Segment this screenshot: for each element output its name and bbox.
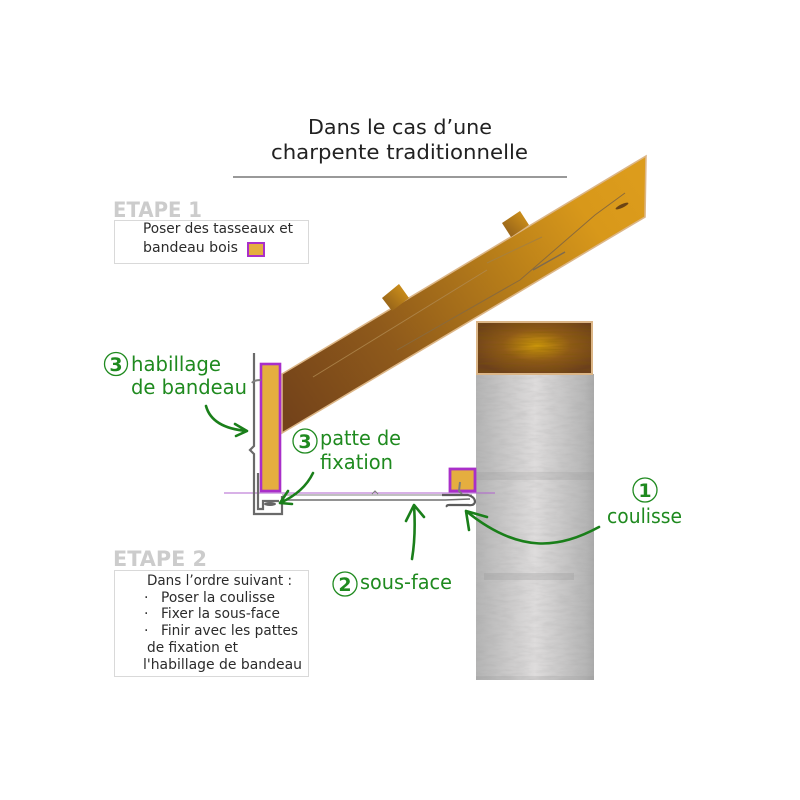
rafter beam [282,156,646,433]
step 2 box: Dans l’ordre suivant : [147,573,292,589]
step 2 box: · [144,590,148,606]
title [233,115,567,177]
label: patte de fixation: 3 [298,431,312,453]
arrow: patte de fixation [280,473,313,504]
label: sous-face [333,570,452,596]
step 1 box: Poser des tasseaux et [143,221,293,237]
step 2 box: Fixer la sous-face [161,606,280,622]
label: patte de fixation [293,426,401,474]
step 1 box [114,220,308,264]
wall column [476,374,594,680]
step 2 box: · [144,606,148,622]
wood end grain [477,322,592,374]
step 2 box: Poser la coulisse [161,590,275,606]
step 2 box: Finir avec les pattes [161,623,298,639]
bandeau board [261,364,280,491]
purple reference line [224,492,495,494]
step 2 box [114,570,308,676]
label: coulisse: 1 [638,480,652,502]
label: habillage de bandeau: habillage [131,352,221,376]
step 2 box: de fixation et [147,640,238,656]
label: patte de fixation: fixation [320,450,393,474]
label: sous-face: 2 [338,574,352,596]
arrow: sous-face [406,505,424,559]
title: charpente traditionnelle [271,140,528,164]
label: sous-face: sous-face [360,570,452,594]
label: coulisse [607,478,682,528]
title: Dans le cas d’une [308,115,492,139]
coulisse profile [442,495,475,507]
step 2 heading: ETAPE 2 [113,547,207,571]
label: habillage de bandeau: de bandeau [131,375,247,399]
batten middle [382,284,409,311]
step 1 heading: ETAPE 1 [113,198,202,222]
batten top [502,211,529,237]
arrow: habillage [206,406,247,436]
habillage de bandeau metal profile [250,353,282,514]
label: habillage de bandeau: 3 [109,354,123,376]
soffit panel [282,491,472,500]
arrow: coulisse [466,511,599,543]
label: habillage de bandeau [104,352,247,399]
step 2 box: · [144,623,148,639]
label: coulisse: coulisse [607,504,682,528]
label: patte de fixation: patte de [320,426,401,450]
small batten section [450,469,475,494]
step 1 box: bandeau bois [143,240,238,256]
icon: wood swatch [248,243,264,256]
step 2 box: l'habillage de bandeau [143,657,302,673]
